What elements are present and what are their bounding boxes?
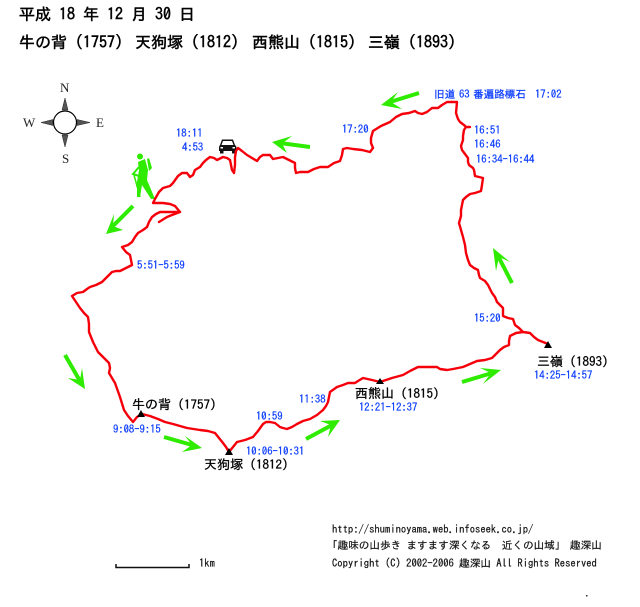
route: red track <box>72 102 548 452</box>
time labels: 5:51-5:59 <box>137 261 185 271</box>
peak label: 西熊山: 西熊山 (1815) <box>355 386 440 400</box>
title: peaks: 天狗塚 (1812) <box>135 34 239 50</box>
time labels: 16:46 <box>474 140 500 150</box>
time labels: 番遍路標石 <box>473 89 526 100</box>
peak label: 牛の背: 牛の背 (1757) <box>132 398 216 411</box>
title: peaks: 牛の背 (1757) <box>19 34 123 50</box>
footer credits: 「趣味の山歩き ますます深くなる 近くの山域」 <box>327 541 565 551</box>
time labels: 16:34-16:44 <box>476 155 535 165</box>
time labels: 10:06-10:31 <box>246 447 304 457</box>
title: peaks <box>19 34 456 50</box>
footer credits: Copyright (C) 2002-2006 趣深山 All Rights Reserved <box>332 558 597 569</box>
time labels: 17:20 <box>342 125 368 135</box>
icon: compass: W <box>23 115 36 130</box>
arrow: near 17:20 <box>381 92 419 109</box>
time labels: 14:25-14:57 <box>534 371 592 381</box>
time labels: 17:02 <box>535 90 561 100</box>
arrow: below 牛の背 <box>164 436 202 452</box>
footer credits: http://shuminoyama.web.infoseek.co.jp/ <box>332 523 533 535</box>
icon: hiker <box>133 154 155 199</box>
time labels: 63 <box>459 90 470 100</box>
peak marker: 天狗塚 <box>225 448 233 455</box>
icon: compass <box>23 80 104 166</box>
time labels: 11:38 <box>299 395 325 405</box>
time labels <box>113 89 592 457</box>
title: peaks: 西熊山 (1815) <box>252 34 356 50</box>
peak label: 天狗塚: 天狗塚 (1812) <box>204 458 288 471</box>
time labels: 12:21-12:37 <box>359 403 417 413</box>
scale bar <box>116 559 215 569</box>
title: peaks: 三嶺 (1893) <box>368 34 456 50</box>
footer credits <box>327 523 602 569</box>
icon: car <box>219 140 236 154</box>
icon: compass: N <box>60 80 70 95</box>
time labels: 10:59 <box>256 412 282 422</box>
icon: compass: S <box>62 151 69 166</box>
arrow: near hiker <box>106 206 133 234</box>
arrow: near car <box>272 136 310 153</box>
time labels: 15:20 <box>474 314 500 324</box>
peak label: 三嶺: 三嶺 (1893) <box>537 355 608 368</box>
time labels: 9:08-9:15 <box>113 425 161 435</box>
time labels: 16:51 <box>474 126 500 136</box>
arrow: east side heading north <box>493 248 512 283</box>
arrow: below 三嶺 ridge <box>462 368 501 384</box>
arrow: west side heading south <box>65 355 85 389</box>
icon: compass: E <box>96 115 104 130</box>
title: date: 平成 18 年 12 月 30 日 <box>19 6 195 22</box>
peak marker: 西熊山 <box>376 378 384 384</box>
time labels: 4:53 <box>182 143 203 153</box>
time labels: 18:11 <box>176 129 202 139</box>
peak marker: 牛の背 <box>137 410 145 417</box>
footer credits: 趣深山 <box>570 540 602 551</box>
peak marker: 三嶺 <box>544 341 552 348</box>
time labels: 旧道 <box>434 90 455 100</box>
scale bar: 1km <box>199 559 215 569</box>
arrow: near 10:59 <box>306 420 340 439</box>
